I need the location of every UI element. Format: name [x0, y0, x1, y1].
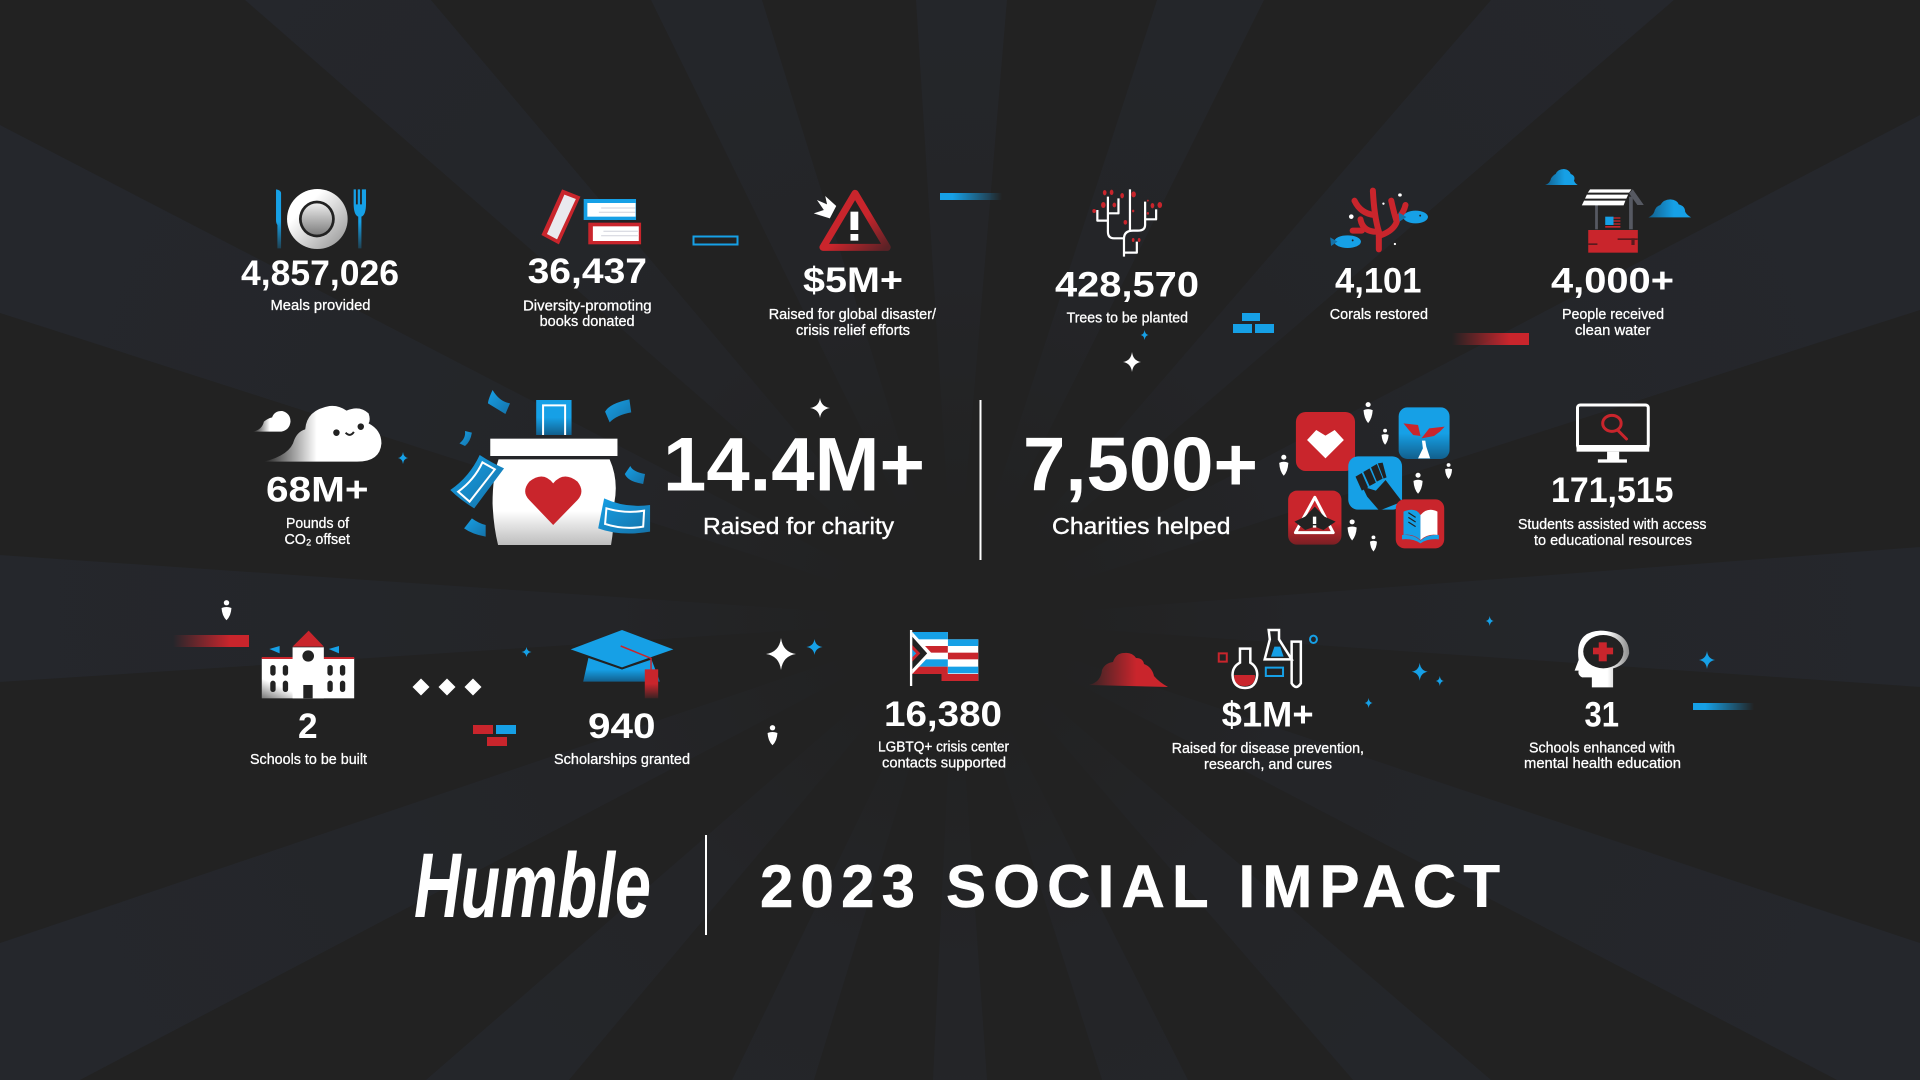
label: Schools to be built [250, 751, 368, 768]
stat: charities helped [1023, 402, 1452, 551]
icon: plate and cutlery [276, 189, 366, 249]
label [769, 306, 937, 339]
label: contacts supported [882, 755, 1006, 772]
number: $1M+ [1222, 696, 1314, 735]
label [1524, 740, 1681, 772]
label: Scholarships granted [554, 751, 690, 768]
stat: raised for charity [450, 390, 925, 545]
icon: donation jar with heart and banknotes [450, 390, 650, 545]
icon: coral and fish [1330, 191, 1428, 249]
label [284, 515, 351, 548]
number: 4,000+ [1551, 262, 1674, 301]
label: Charities helped [1052, 513, 1230, 539]
number: 4,857,026 [241, 254, 399, 293]
stat: books donated [523, 189, 652, 330]
label: LGBTQ+ crisis center [878, 739, 1009, 756]
label: CO₂ offset [284, 531, 351, 548]
icon: lab flasks [1219, 630, 1317, 688]
logo wordmark: Humble [414, 835, 651, 937]
label: Corals restored [1330, 306, 1428, 323]
label: Diversity-promoting [523, 298, 652, 315]
stat: CO2 offset [253, 406, 381, 548]
stat: disaster relief [769, 193, 937, 339]
title: 2023 SOCIAL IMPACT [760, 853, 1500, 920]
icon: stack of books [541, 189, 641, 244]
label: research, and cures [1204, 756, 1332, 773]
label [1172, 740, 1364, 773]
icon: warning triangle [814, 193, 887, 247]
label: Raised for global disaster/ [769, 306, 937, 323]
label: Meals provided [270, 297, 370, 314]
icon: water well with clouds [1545, 169, 1691, 253]
label: to educational resources [1534, 532, 1692, 549]
label: Raised for disease prevention, [1172, 740, 1364, 757]
icon: smiling cloud [253, 406, 381, 462]
label: crisis relief efforts [796, 322, 910, 339]
number: 36,437 [528, 252, 647, 291]
number: 2 [298, 707, 318, 746]
stat: disease prevention [1172, 630, 1364, 773]
icon: head with medical cross [1575, 631, 1629, 687]
icon: graduation cap [571, 630, 673, 698]
number: 14.4M+ [663, 423, 925, 508]
label [523, 298, 652, 330]
label: clean water [1575, 322, 1651, 339]
icon: tree [1092, 189, 1162, 257]
stat: corals restored [1330, 191, 1428, 323]
number: 940 [588, 707, 656, 746]
stat: trees planted [1055, 189, 1199, 327]
icon: pride flags [910, 630, 978, 686]
stat: meals provided [241, 189, 399, 314]
number: 7,500+ [1023, 423, 1258, 508]
number: 4,101 [1335, 262, 1422, 301]
number: $5M+ [803, 261, 903, 300]
label: Trees to be planted [1067, 310, 1188, 327]
icon: cause app tiles with people [1279, 402, 1452, 551]
number: 68M+ [266, 471, 368, 510]
label [1562, 306, 1664, 339]
label: Raised for charity [703, 513, 895, 539]
footer: logo and title [414, 835, 1500, 937]
label [1518, 516, 1706, 549]
stat: mental health education [1524, 631, 1681, 772]
stat: LGBTQ+ crisis contacts [878, 630, 1009, 772]
label: Schools enhanced with [1529, 740, 1675, 757]
label: People received [1562, 306, 1664, 323]
icon: school building [262, 631, 354, 698]
number: 31 [1584, 696, 1619, 735]
label: Pounds of [286, 515, 350, 532]
stat: scholarships granted [554, 630, 690, 768]
stat: schools built [250, 631, 368, 768]
label: books donated [540, 313, 635, 330]
label [878, 739, 1009, 772]
number: 16,380 [884, 695, 1002, 734]
icon: monitor with magnifier [1577, 405, 1649, 463]
stat: clean water [1545, 169, 1691, 339]
stat: students assisted [1518, 405, 1706, 549]
number: 428,570 [1055, 266, 1199, 305]
divider between headline stats [980, 400, 982, 560]
decorative floating shapes: bars, bricks, diamonds, clouds, people [173, 193, 1754, 746]
footer divider [705, 835, 707, 935]
label: Students assisted with access [1518, 516, 1706, 533]
label: mental health education [1524, 755, 1681, 772]
decorative sparkles [398, 330, 1715, 708]
number: 171,515 [1551, 471, 1674, 510]
